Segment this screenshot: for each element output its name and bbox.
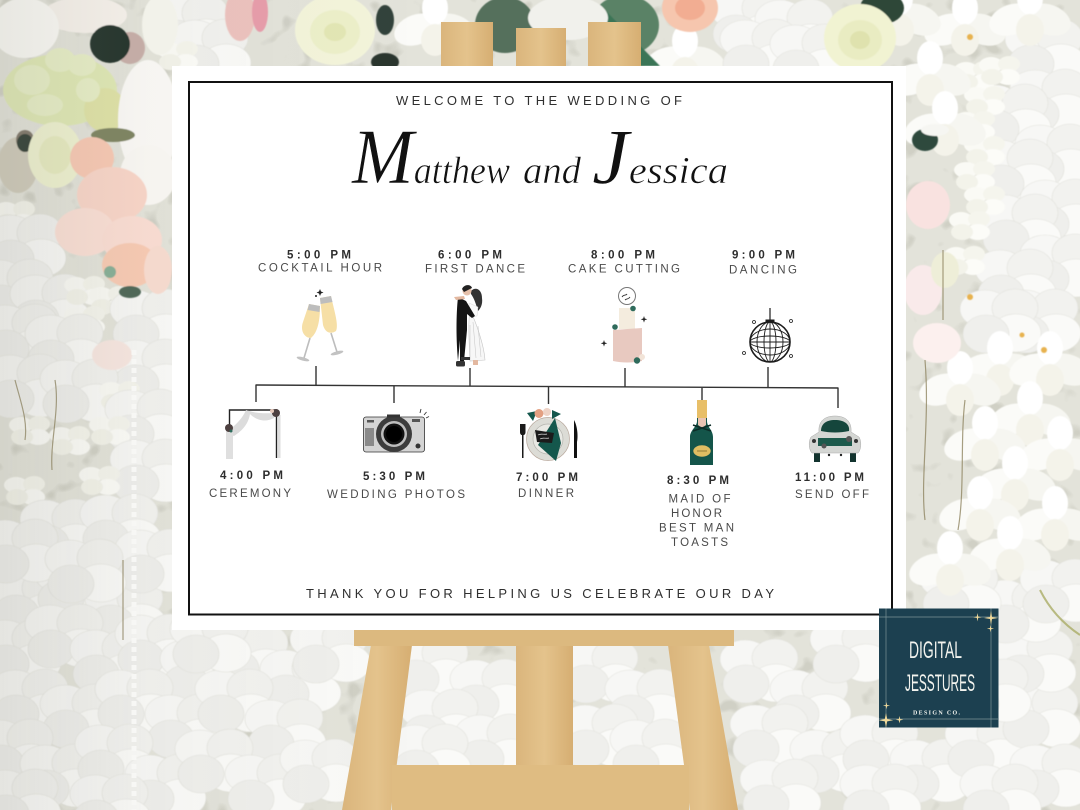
event: 7:00 PM dinner	[516, 408, 578, 500]
footer: thank you line: THANK YOU FOR HELPING US CELEBRATE OUR DAY	[306, 586, 774, 601]
time label: 6:00 PM	[438, 250, 502, 262]
logo wordmark	[905, 637, 975, 716]
panel: sign board	[172, 66, 906, 630]
event: 8:30 PM toasts	[659, 400, 734, 549]
icon: getaway car	[809, 416, 861, 462]
panel: sign border	[189, 82, 892, 614]
logo wordmark: DESIGN CO.	[913, 710, 960, 716]
heading: welcome line: WELCOME TO THE WEDDING OF	[396, 93, 682, 108]
icon: champagne flutes	[296, 289, 344, 362]
logo: Digital Jesstures badge	[879, 608, 998, 728]
time label: 11:00 PM	[795, 472, 864, 484]
top strip blooms	[150, 0, 945, 89]
easel ledge	[354, 625, 734, 646]
easel legs	[342, 645, 738, 810]
white hydrangea lower wall	[0, 554, 1080, 810]
event name: WEDDING PHOTOS	[327, 489, 465, 501]
event name: SEND OFF	[795, 489, 869, 501]
event: 8:00 PM cake cutting	[568, 250, 680, 364]
icon: disco ball	[742, 308, 792, 362]
event name, four lines	[659, 494, 734, 549]
logo: Digital Jesstures badge: JESSTURES	[905, 670, 975, 697]
time label: 8:30 PM	[667, 475, 729, 487]
event: 5:30 PM wedding photos	[327, 409, 465, 501]
easel top pegs	[441, 22, 641, 68]
time label: 8:00 PM	[591, 250, 655, 262]
logo sparkles	[879, 611, 998, 727]
icon: wedding cake	[601, 288, 647, 364]
icon: ceremony arch	[225, 409, 280, 459]
easel: wooden stand	[342, 22, 738, 810]
event name: CAKE CUTTING	[568, 264, 680, 276]
time label: 9:00 PM	[732, 250, 795, 262]
event name: DANCING	[729, 264, 797, 276]
event name, four lines: TOASTS	[671, 537, 728, 549]
logo wordmark: DIGITAL	[909, 637, 962, 664]
event: 6:00 PM first dance	[425, 250, 525, 366]
leaves and pink flowers	[0, 0, 1047, 370]
icon: couple dancing	[454, 285, 485, 366]
timeline: connector lines	[256, 366, 838, 408]
event name, four lines: BEST MAN	[659, 522, 734, 534]
event: 11:00 PM send off	[795, 416, 869, 501]
icon: camera	[364, 409, 429, 452]
time label: 5:30 PM	[363, 471, 425, 483]
event name: COCKTAIL HOUR	[258, 262, 382, 274]
icon: place setting	[520, 408, 578, 461]
white blossoms left side	[0, 201, 196, 603]
event name: DINNER	[518, 488, 574, 500]
event: 4:00 PM ceremony	[209, 409, 291, 500]
bead string	[132, 350, 136, 810]
title: couple names	[351, 113, 728, 200]
event name, four lines: MAID OF	[668, 494, 730, 506]
event name: FIRST DANCE	[425, 264, 525, 276]
title: couple names: Matthew	[351, 113, 511, 200]
white orchids and wisteria right side	[885, 0, 1080, 596]
event: 5:00 PM cocktail hour	[258, 250, 382, 362]
title: couple names: and	[523, 150, 582, 192]
event name, four lines: HONOR	[671, 508, 722, 520]
title: couple names: Jessica	[592, 113, 728, 200]
time label: 4:00 PM	[220, 470, 283, 482]
event name: CEREMONY	[209, 488, 291, 500]
time label: 5:00 PM	[287, 250, 351, 262]
event: 9:00 PM dancing	[729, 250, 797, 362]
time label: 7:00 PM	[516, 472, 578, 484]
icon: champagne bottle	[690, 400, 713, 465]
